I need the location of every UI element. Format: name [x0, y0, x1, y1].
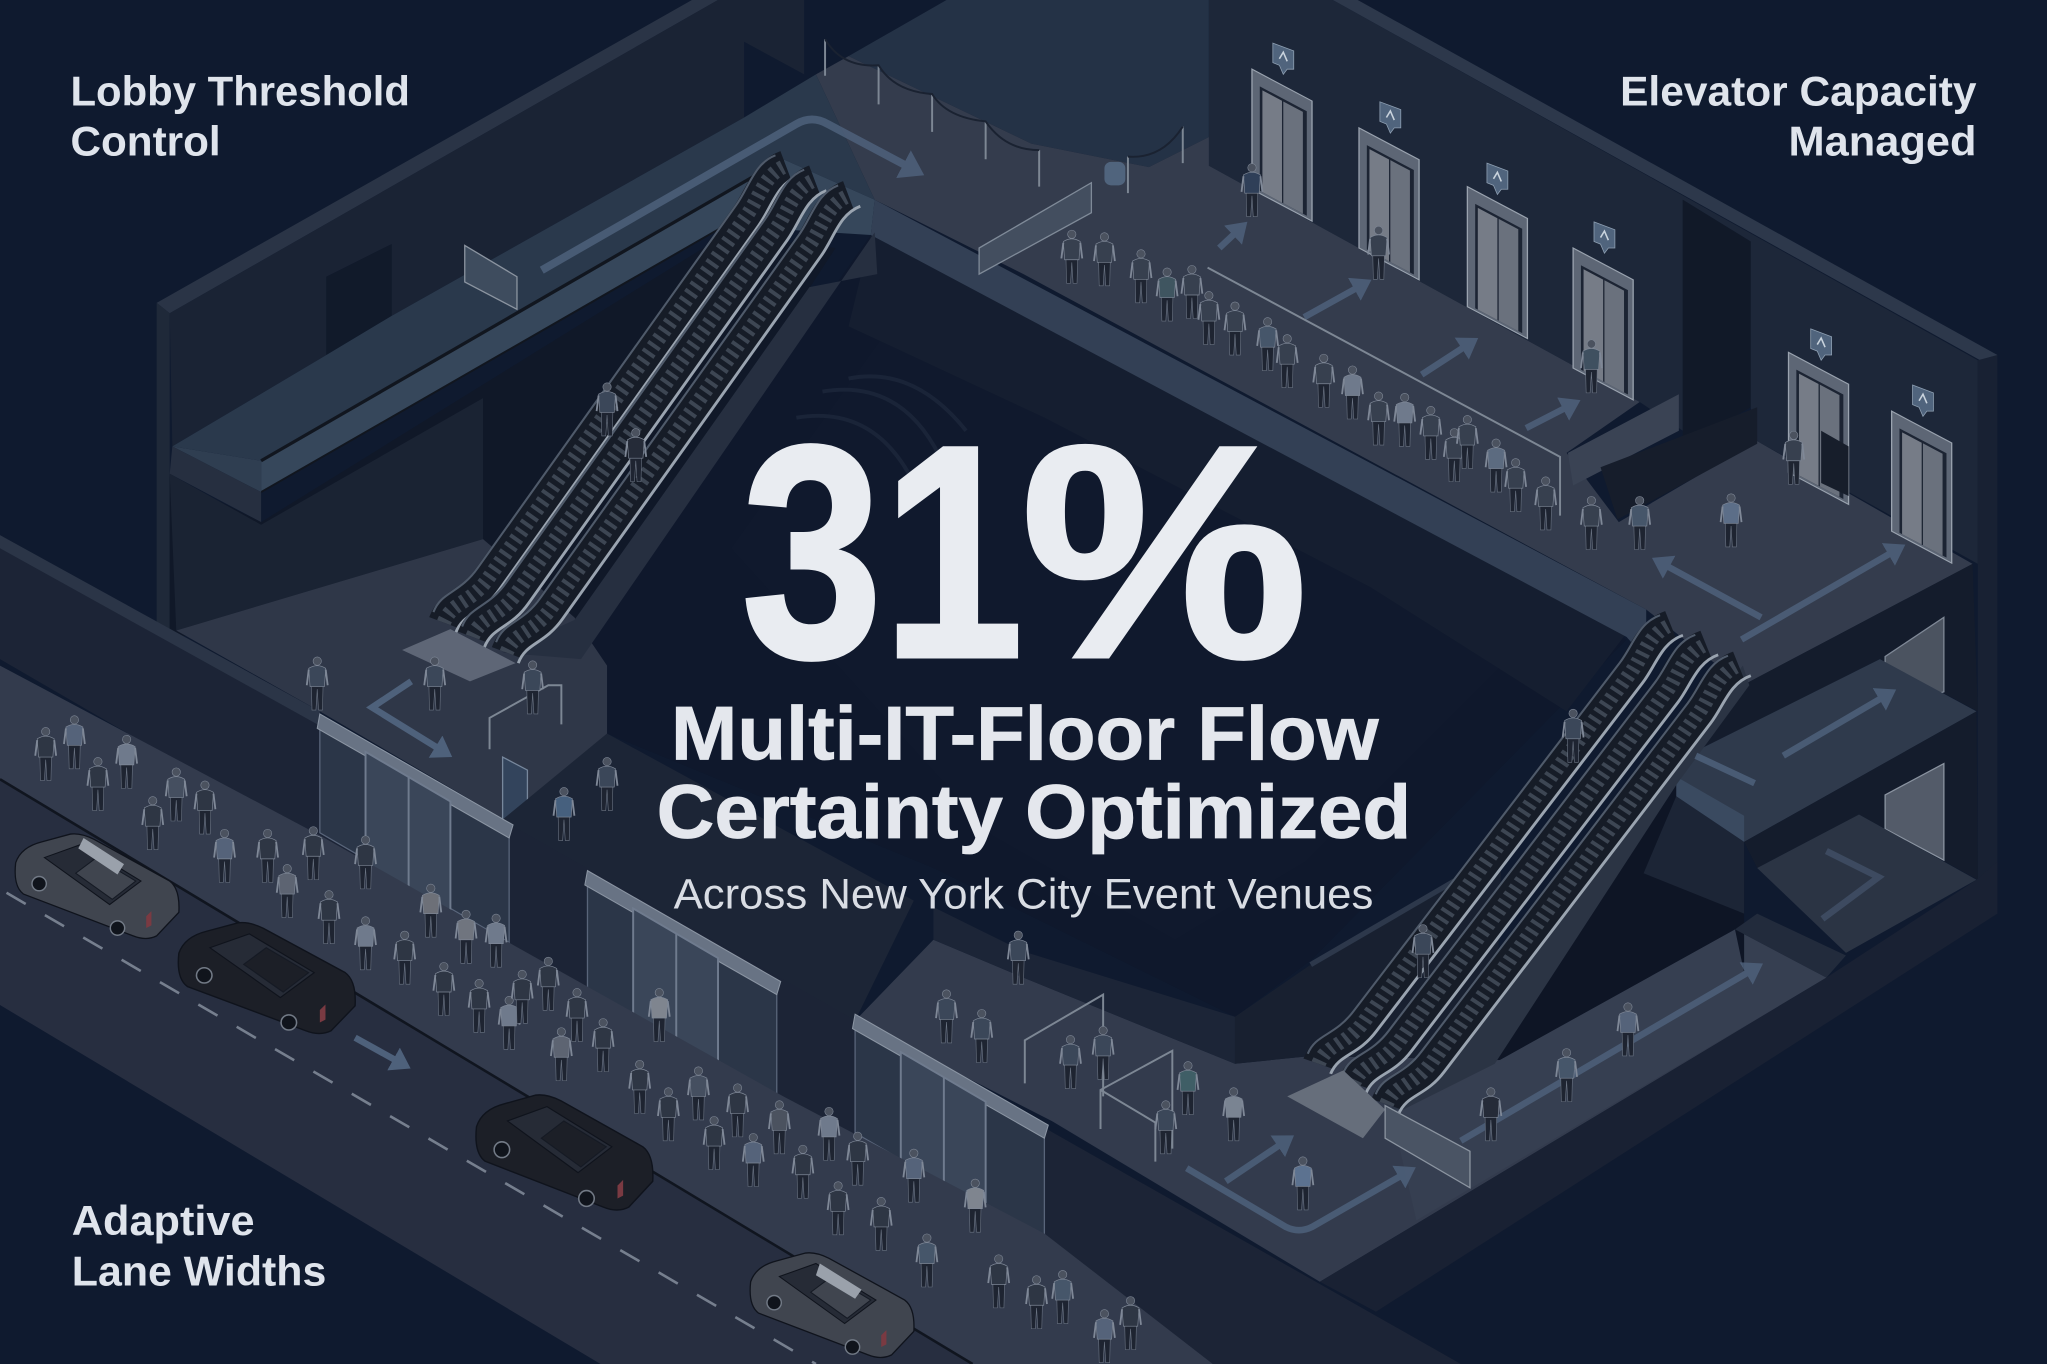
upper lobby blue wall	[849, 0, 1209, 167]
sidewalk crowd	[35, 716, 1141, 1363]
lobby and lower floor people	[307, 383, 1638, 1210]
central void	[581, 235, 1627, 1017]
upper corridor arrow	[542, 119, 914, 270]
lower landing	[1287, 1070, 1385, 1138]
headline statistic: %	[1021, 384, 1308, 722]
lobby sign	[503, 757, 527, 835]
label: Elevator Capacity Managed: Elevator Capacity	[1620, 68, 1977, 115]
label: Elevator Capacity Managed: Managed	[1789, 117, 1977, 164]
front building wall	[0, 535, 1461, 1364]
left building rim	[0, 535, 320, 726]
entrance doors	[317, 714, 1048, 1243]
lower stanchions	[1025, 995, 1172, 1162]
mezzanine parapet	[170, 159, 875, 522]
central ledge band	[871, 200, 1646, 659]
queue barrier rail	[1208, 268, 1560, 516]
upper right elevator wall	[1209, 0, 1997, 914]
headline statistic: 31	[742, 384, 1024, 722]
curb line	[0, 779, 973, 1364]
subtitle: Across New York City Event Venues	[674, 870, 1373, 918]
low partition walls	[1568, 394, 1757, 519]
elevators	[1252, 69, 1952, 563]
stanchion ropes	[825, 39, 1183, 193]
upper floor crowd	[1061, 164, 1804, 550]
headline title: Multi-IT-Floor Flow	[671, 692, 1380, 777]
lobby floor	[176, 539, 607, 822]
check badges	[307, 162, 1125, 632]
lobby stanchions	[490, 685, 561, 749]
dark space under right escalator	[1495, 783, 1744, 1060]
road	[0, 779, 973, 1364]
left escalators	[433, 155, 860, 663]
upper right floor	[816, 56, 1973, 685]
upper-left mezzanine back wall	[157, 0, 804, 640]
headline title: Certainty Optimized	[657, 770, 1411, 855]
lane dashes	[7, 893, 816, 1364]
outer base band	[1320, 861, 1997, 1312]
right lower structure	[1644, 564, 1978, 978]
sidewalk	[0, 666, 1213, 1364]
guide arrows	[1187, 228, 1897, 1230]
building front band	[496, 734, 914, 1021]
lower floor walkway tint	[1389, 929, 1826, 1220]
upper lobby glass gate	[979, 183, 1091, 274]
label: Lobby Threshold Control: Control	[70, 117, 221, 164]
right escalator support	[1390, 666, 1749, 1109]
cars	[15, 834, 914, 1357]
label: Adaptive Lane Widths: Lane Widths	[72, 1248, 326, 1295]
label: Lobby Threshold Control: Lobby Threshold	[70, 68, 410, 115]
elevator direction signs	[1273, 43, 1933, 416]
lower wall under mezzanine	[170, 235, 836, 640]
lower glass gate	[1385, 1106, 1470, 1188]
right escalators	[1308, 615, 1751, 1114]
lobby arrow	[372, 681, 444, 752]
left escalator support	[503, 232, 877, 659]
road arrow	[355, 1038, 402, 1064]
label: Adaptive Lane Widths: Adaptive	[72, 1197, 255, 1244]
mezzanine glass gate	[465, 245, 517, 309]
mezzanine floor	[172, 74, 875, 461]
right lower floor	[855, 929, 1826, 1282]
escalator landing	[402, 629, 516, 681]
pit wall	[933, 861, 1501, 1064]
